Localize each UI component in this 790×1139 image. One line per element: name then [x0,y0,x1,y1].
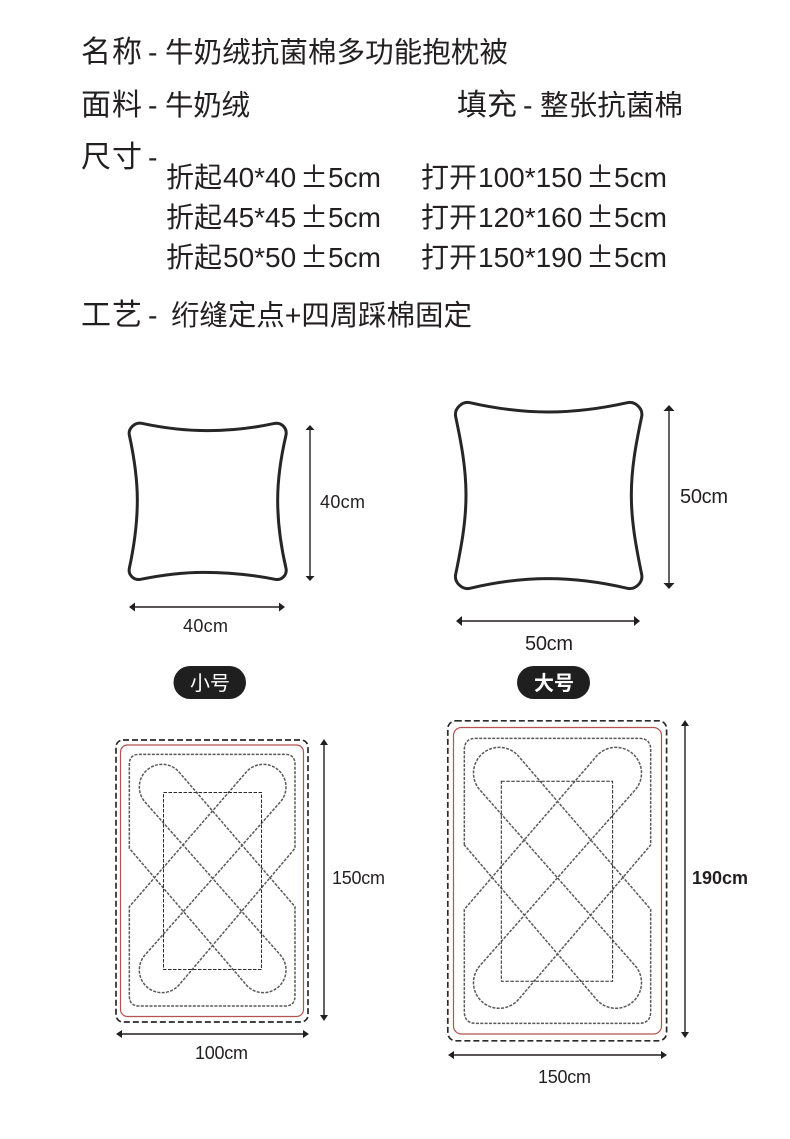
badge: large [517,666,590,699]
pillow outline 40cm [129,423,286,580]
folded sizes: 折起 [166,162,222,193]
quilt outer dashed edge [116,740,308,1022]
quilting stitch pattern [464,738,651,1023]
badge: small [174,666,246,699]
quilting stitch pattern [129,754,295,1006]
folded sizes [166,156,381,276]
opened sizes: 打开 [421,242,477,273]
fabric row: 面料 [81,89,142,122]
large pillow diagram [455,402,728,655]
height label: 40cm [320,492,365,512]
opened sizes [421,156,667,276]
specification text block [81,36,683,332]
size label: - [148,142,158,174]
filling row: 整张抗菌棉 [540,90,683,122]
folded sizes: 折起 [166,202,222,233]
opened sizes: ± [586,196,614,236]
folded sizes: ± [300,196,328,236]
height label: 150cm [332,868,385,888]
horizontal arrow 150cm [448,1051,667,1059]
folded sizes: 40*40 [223,162,296,193]
opened sizes: ± [586,156,614,196]
opened sizes: ± [586,236,614,276]
badge: small: 小号 [190,672,230,695]
opened sizes: 打开 [421,202,477,233]
fabric row [81,89,250,122]
height label: 190cm [692,868,748,888]
small pillow diagram [129,423,365,636]
opened sizes: 150*190 [478,242,582,273]
folded sizes: 5cm [328,202,381,233]
opened sizes: 打开 [421,162,477,193]
opened sizes: 5cm [614,162,667,193]
width label: 150cm [538,1067,591,1087]
vertical arrow 190cm [681,720,689,1038]
craft row: 工艺 [81,299,142,332]
fabric row: 牛奶绒 [165,90,250,122]
badge: large: 大号 [534,672,574,695]
fabric row: - [148,90,158,122]
height label: 50cm [680,486,728,508]
opened sizes: 5cm [614,242,667,273]
craft row: 绗缝定点+四周踩棉固定 [171,300,472,332]
opened sizes: 5cm [614,202,667,233]
filling row [457,89,683,122]
name row: 名称 [81,36,142,69]
folded sizes: ± [300,236,328,276]
vertical arrow 40cm [306,425,314,581]
large quilt diagram [448,720,748,1087]
width label: 40cm [183,616,228,636]
width label: 50cm [525,633,573,655]
horizontal arrow 50cm [456,616,640,626]
folded sizes: 45*45 [223,202,296,233]
folded sizes: 折起 [166,242,222,273]
small quilt diagram [116,739,385,1063]
opened sizes: 100*150 [478,162,582,193]
horizontal arrow 40cm [129,602,285,612]
vertical arrow 50cm [664,405,674,589]
pillow outline 50cm [455,402,642,589]
quilt red seam [120,745,304,1016]
folded sizes: 5cm [328,242,381,273]
name row: 牛奶绒抗菌棉多功能抱枕被 [165,37,508,69]
folded sizes: 50*50 [223,242,296,273]
quilt outer dashed edge [448,721,667,1041]
name row: - [148,37,158,69]
horizontal arrow 100cm [116,1030,309,1038]
size label: 尺寸 [81,141,142,174]
vertical arrow 150cm [320,739,328,1021]
filling row: 填充 [457,89,517,122]
filling row: - [523,90,532,122]
inner dashed rectangle [164,792,262,970]
quilt red seam [454,728,662,1034]
inner dashed rectangle [501,781,613,981]
folded sizes: 5cm [328,162,381,193]
width label: 100cm [195,1043,248,1063]
craft row: - [148,300,158,332]
opened sizes: 120*160 [478,202,582,233]
folded sizes: ± [300,156,328,196]
